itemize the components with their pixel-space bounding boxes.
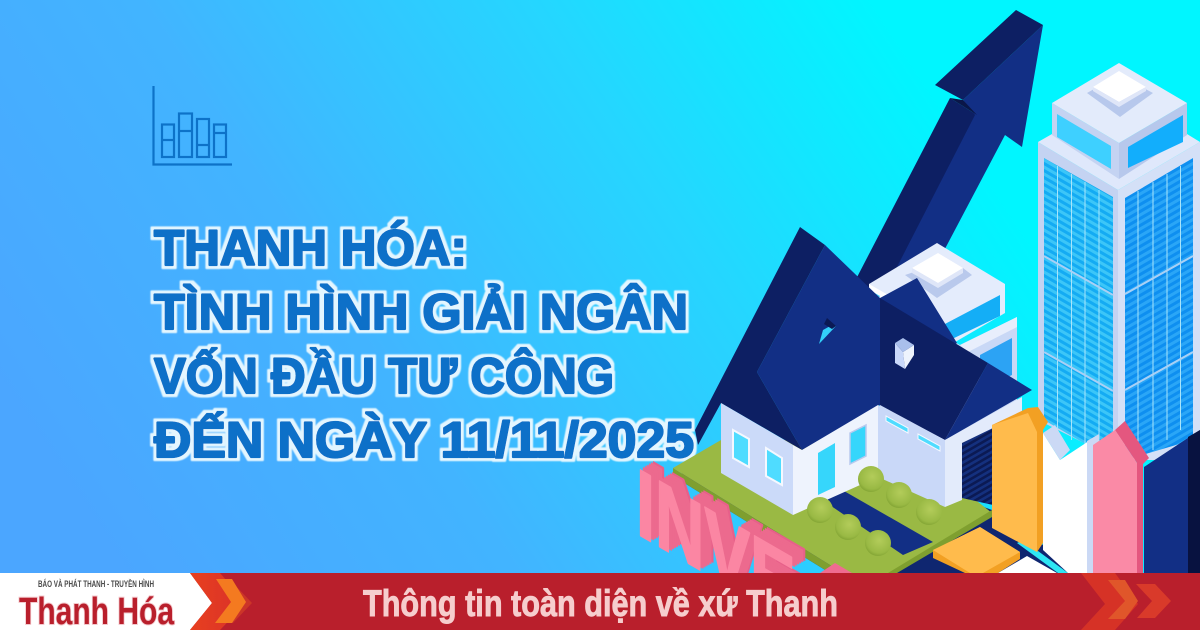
illustration: orange tile: [933, 527, 1020, 573]
illustration: ground base: [673, 440, 1068, 573]
title: ĐẾN NGÀY 11/11/2025: [154, 412, 694, 468]
illustration: bushes: [807, 466, 942, 556]
logo tagline: BÁO VÀ PHÁT THANH - TRUYỀN HÌNH: [38, 579, 154, 589]
chimney: [895, 338, 914, 369]
title: THANH HÓA:: [154, 220, 467, 276]
illustration: lawn: [673, 440, 992, 573]
footer band: [0, 573, 1200, 630]
footer chevron right: [1081, 573, 1171, 630]
illustration: navy block: [1144, 430, 1200, 573]
illustration: tower: [1038, 63, 1200, 460]
illustration: white arrow: [1043, 425, 1099, 573]
title: VỐN ĐẦU TƯ CÔNG: [154, 347, 614, 404]
slogan: Thông tin toàn diện về xứ Thanh: [363, 583, 838, 624]
icon: bar chart: [154, 86, 232, 164]
illustration: pink arrow: [1093, 421, 1149, 573]
footer logo panel: [0, 573, 212, 630]
illustration: lettering fragment: [820, 563, 852, 573]
title: [154, 220, 694, 468]
footer chevron left: [190, 573, 252, 630]
illustration: background building: [869, 243, 1017, 440]
illustration: rising arrow: [840, 10, 1043, 310]
title: TÌNH HÌNH GIẢI NGÂN: [154, 284, 688, 340]
illustration: house: [695, 227, 1032, 515]
illustration: orange arrow: [992, 407, 1048, 552]
